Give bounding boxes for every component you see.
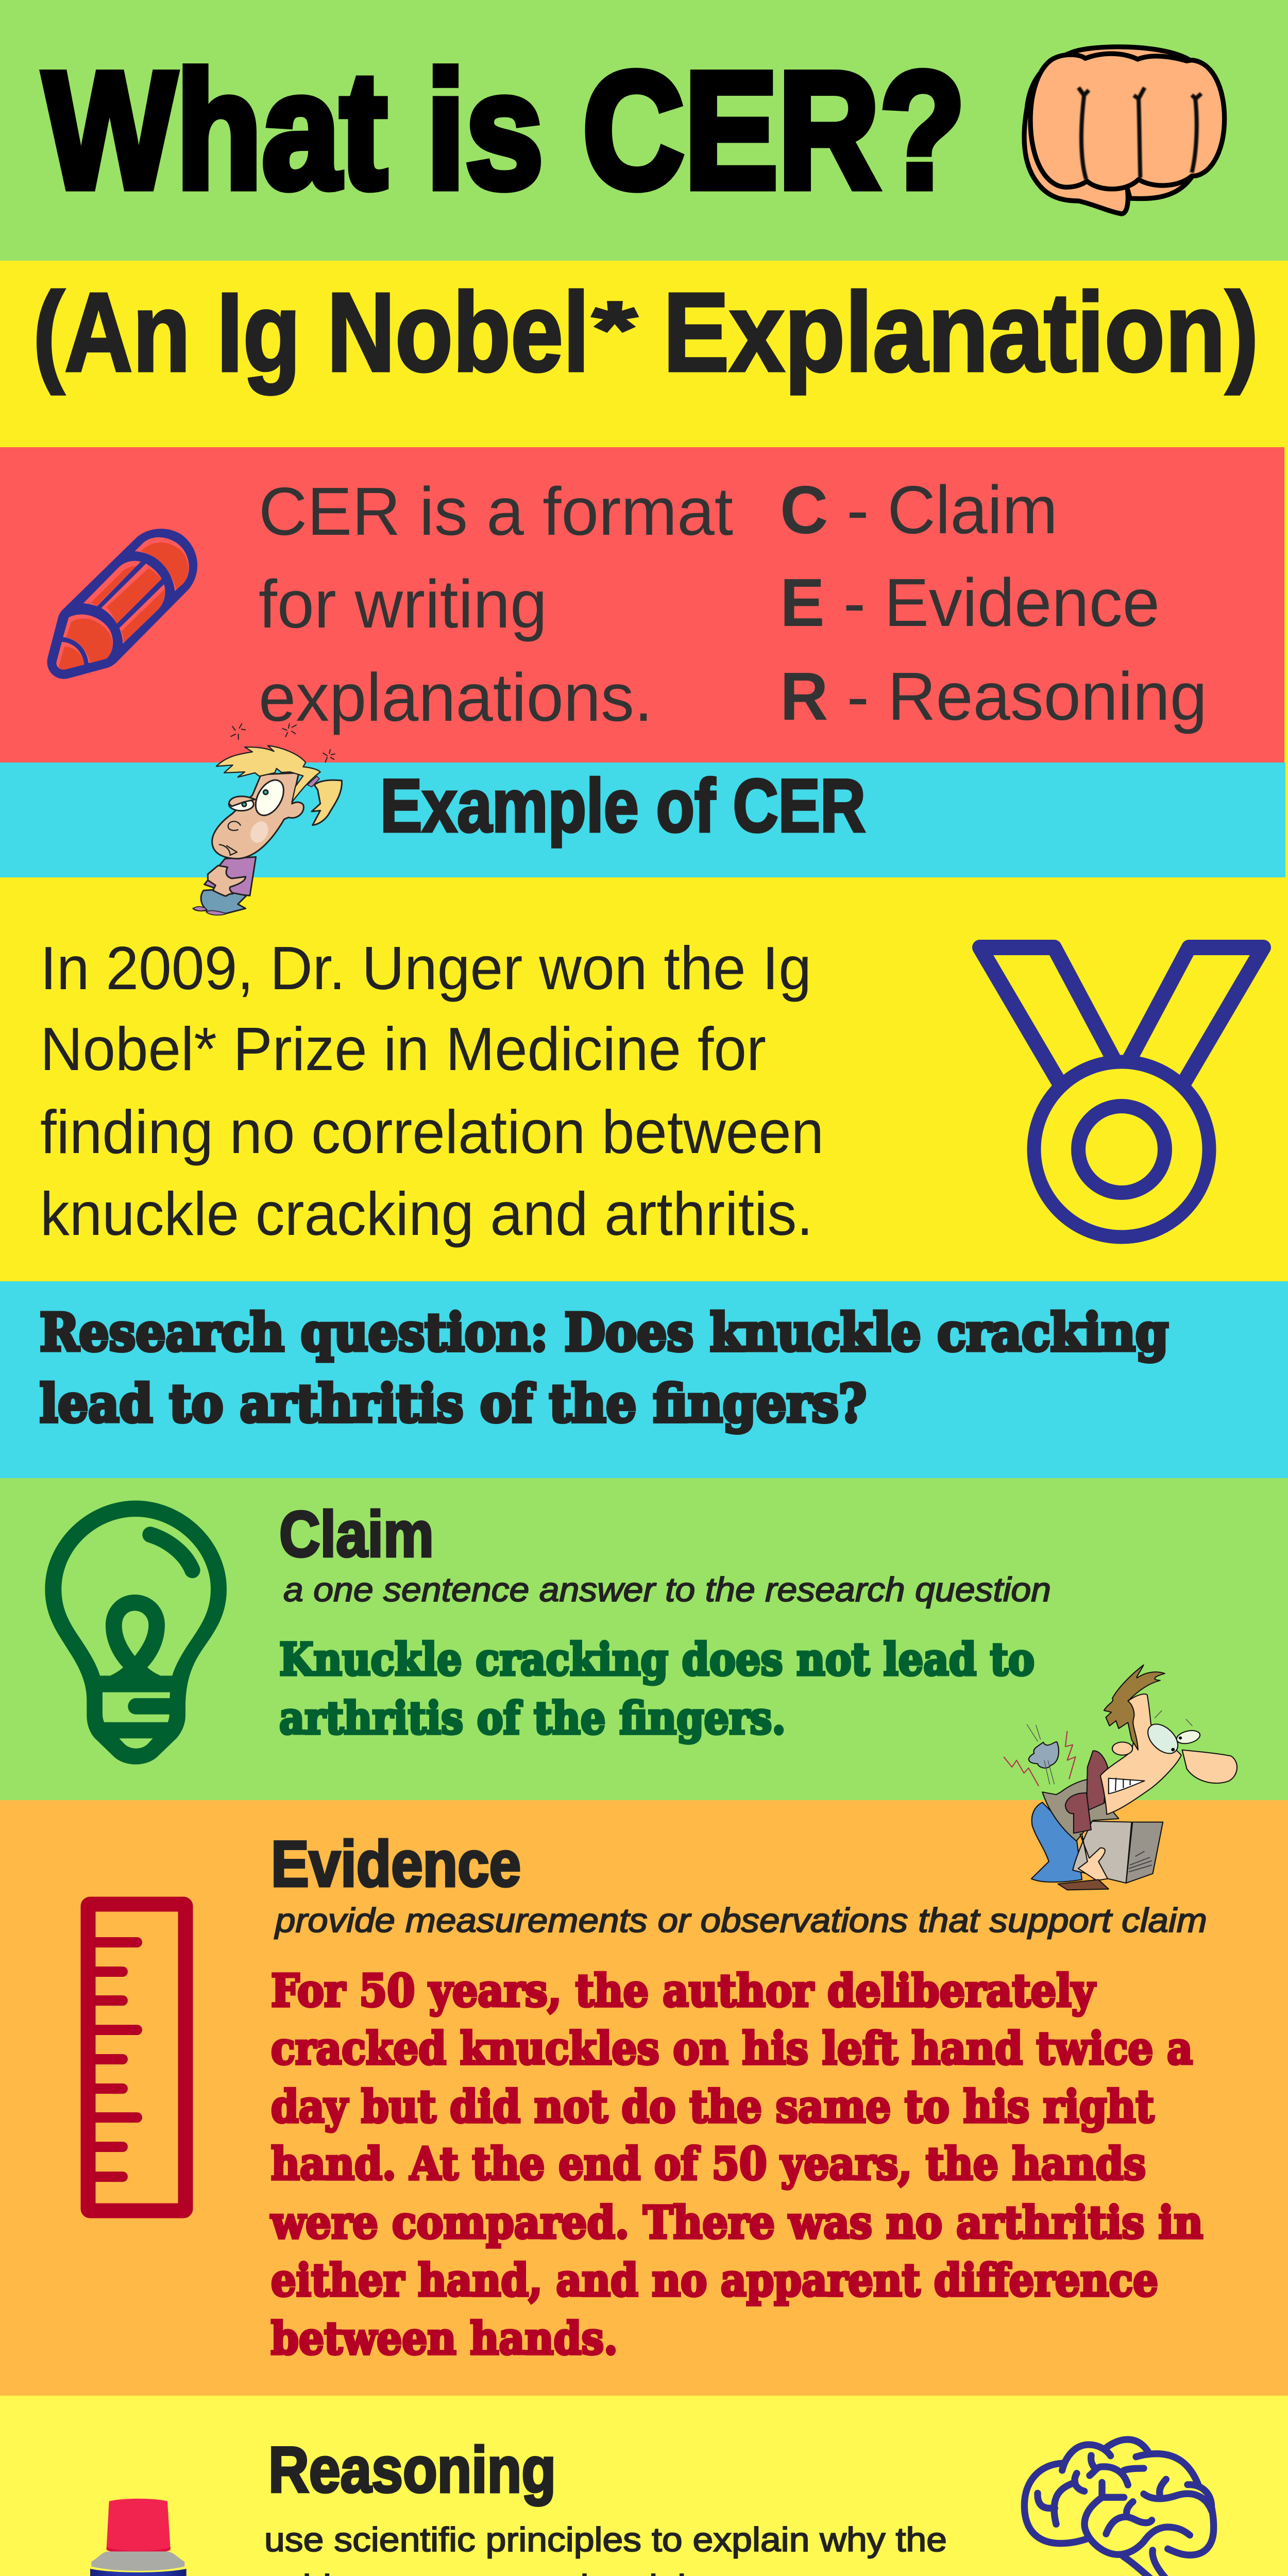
text: story xyxy=(40,934,824,1248)
cartoon: man lifting box xyxy=(1004,1665,1237,1890)
subtitle: * xyxy=(592,285,637,372)
icon: fist xyxy=(1024,47,1225,214)
icon: pencil xyxy=(47,529,197,679)
icon: medal xyxy=(980,947,1263,1237)
text: C E R list: C - Claim xyxy=(780,472,1058,548)
text: story: In 2009, Dr. Unger won the Ig xyxy=(40,934,811,1003)
subtitle xyxy=(33,270,1259,395)
panel: research question xyxy=(0,1281,1288,1478)
text: C E R list: E - Evidence xyxy=(780,565,1160,640)
text: definition: for writing xyxy=(259,566,547,642)
text: evidence body xyxy=(270,1965,1203,2365)
text: story: Nobel* Prize in Medicine for xyxy=(40,1015,766,1083)
text: evidence body: day but did not do the same to his right xyxy=(271,2081,1154,2133)
text: evidence body: were compared. There was no arthritis in xyxy=(270,2197,1203,2249)
cartoon: confused girl xyxy=(193,724,342,915)
text: research question xyxy=(40,1302,1168,1434)
panel: Ig Nobel story xyxy=(0,877,1288,1281)
panel: subtitle banner xyxy=(0,261,1288,447)
icon: ruler xyxy=(88,1904,185,2211)
text: evidence body: either hand, and no apparent difference xyxy=(271,2255,1158,2307)
text: evidence definition: provide measurements or observations that support claim xyxy=(274,1901,1207,1939)
subtitle: (An Ig Nobel xyxy=(33,270,589,395)
text: claim answer: Knuckle cracking does not lead to xyxy=(279,1634,1035,1686)
icon: brain xyxy=(1024,2439,1214,2576)
text: research question: lead to arthritis of the fingers? xyxy=(40,1373,867,1434)
text: reasoning definition xyxy=(264,2520,947,2576)
heading: example of CER: Example of CER xyxy=(380,764,866,848)
panel: example heading xyxy=(0,762,1285,877)
text: claim answer xyxy=(279,1634,1035,1744)
text: definition xyxy=(259,473,733,735)
text: research question: Research question: Does knuckle cracking xyxy=(40,1302,1168,1363)
text: story: finding no correlation between xyxy=(40,1098,824,1166)
heading: reasoning: Reasoning xyxy=(268,2434,556,2506)
text: definition: CER is a format xyxy=(259,473,733,549)
icon: WD-40 can xyxy=(90,2499,187,2576)
text: evidence body: For 50 years, the author deliberately xyxy=(271,1965,1096,2017)
icon: light bulb xyxy=(45,1501,227,1765)
text: evidence body: hand. At the end of 50 years, the hands xyxy=(271,2138,1146,2190)
text: claim answer: arthritis of the fingers. xyxy=(279,1692,786,1744)
text: reasoning definition: use scientific principles to explain why the xyxy=(264,2520,947,2558)
heading: claim: Claim xyxy=(279,1499,434,1570)
panel: reasoning xyxy=(0,2396,1288,2576)
text: definition: explanations. xyxy=(259,659,653,735)
text: claim definition: a one sentence answer to the research question xyxy=(283,1570,1051,1608)
panel: CER definition xyxy=(0,447,1284,764)
panel: title banner xyxy=(0,0,1288,261)
text: C E R list xyxy=(780,472,1207,734)
heading: evidence: Evidence xyxy=(271,1828,521,1900)
text: evidence body: cracked knuckles on his left hand twice a xyxy=(271,2023,1193,2075)
title: What is CER? xyxy=(43,38,965,223)
text: story: knuckle cracking and arthritis. xyxy=(40,1180,813,1248)
text: evidence body: between hands. xyxy=(271,2313,618,2365)
text: C E R list: R - Reasoning xyxy=(780,658,1207,734)
panel: evidence xyxy=(0,1800,1288,2396)
panel: claim xyxy=(0,1478,1288,1800)
